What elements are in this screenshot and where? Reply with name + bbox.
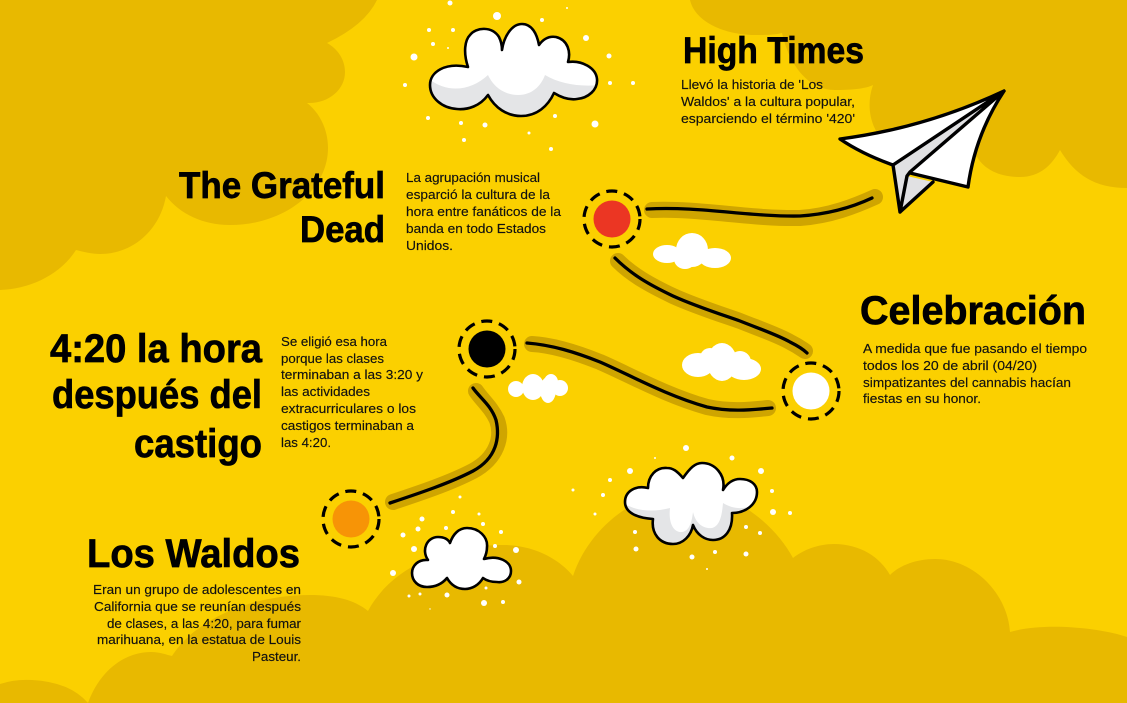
heading: 4:20 la hora después del castigo: después del — [52, 373, 262, 417]
text: Los Waldos: Eran un grupo de adolescentes en — [93, 582, 301, 597]
text: 4:20: Se eligió esa hora — [281, 334, 388, 349]
text: Los Waldos: marihuana, en la estatua de Louis — [97, 632, 302, 647]
text: The Grateful Dead — [406, 170, 562, 253]
text: The Grateful Dead: banda en todo Estados — [406, 221, 547, 236]
text: Los Waldos: California que se reunían después — [94, 599, 302, 614]
text: Celebración — [863, 341, 1087, 406]
heading: The Grateful Dead — [179, 165, 385, 250]
text: High Times: Waldos' a la cultura popular, — [681, 94, 855, 109]
milestone: white — [783, 363, 839, 419]
paper plane — [840, 91, 1004, 212]
heading: High Times: High Times — [683, 30, 864, 71]
text: 4:20: las 4:20. — [281, 435, 331, 450]
background cloud: top right — [690, 0, 1127, 188]
background cloud: top left — [0, 0, 377, 290]
text: 4:20: castigos terminaban a — [281, 418, 415, 433]
text: 4:20: terminaban a las 3:20 y — [281, 367, 424, 382]
path segment: 4:20 to Celebración — [527, 343, 772, 410]
heading: The Grateful Dead: The Grateful — [179, 165, 385, 206]
text: Celebración: simpatizantes del cannabis hacían — [863, 375, 1071, 390]
text: 4:20 — [281, 334, 424, 450]
text: High Times: Llevó la historia de 'Los — [681, 77, 824, 92]
heading: Celebración: Celebración — [860, 289, 1086, 333]
heading: The Grateful Dead: Dead — [300, 209, 385, 250]
heading: Los Waldos: Los Waldos — [87, 532, 300, 576]
text: The Grateful Dead: Unidos. — [406, 238, 453, 253]
heading: 4:20 la hora después del castigo: castigo — [134, 422, 262, 466]
cloud: bottom right with sparkles — [572, 445, 792, 570]
cloud: bottom left with sparkles — [390, 496, 522, 610]
text: Los Waldos: de clases, a las 4:20, para fumar — [107, 616, 302, 631]
milestone: black — [459, 321, 515, 377]
text: Celebración: fiestas en su honor. — [863, 391, 981, 406]
text: The Grateful Dead: La agrupación musical — [406, 170, 540, 185]
text: Los Waldos: Pasteur. — [252, 649, 301, 664]
heading: 4:20 la hora después del castigo — [50, 327, 263, 466]
text: The Grateful Dead: hora entre fanáticos de la — [406, 204, 562, 219]
text: High Times — [681, 77, 855, 126]
heading: 4:20 la hora después del castigo: 4:20 la hora — [50, 327, 263, 371]
text: 4:20: extracurriculares o los — [281, 401, 417, 416]
text: The Grateful Dead: esparció la cultura de la — [406, 187, 551, 202]
background clouds: bottom — [0, 490, 1127, 703]
small cloud near black milestone — [508, 374, 568, 403]
text: Los Waldos — [93, 582, 302, 664]
path segment: Grateful Dead to plane — [647, 197, 875, 218]
milestone: red — [584, 191, 640, 247]
path segment: Celebración to Grateful Dead — [615, 258, 807, 353]
text: Celebración: todos los 20 de abril (04/20) — [863, 358, 1037, 373]
text: 4:20: porque las clases — [281, 351, 385, 366]
small cloud near red milestone — [653, 233, 731, 269]
text: Celebración: A medida que fue pasando el tiempo — [863, 341, 1087, 356]
cloud: top with sparkles — [403, 0, 635, 151]
small cloud near white milestone — [682, 343, 761, 381]
milestone: orange — [323, 491, 379, 547]
path segment: Los Waldos to 4:20 — [390, 388, 499, 503]
text: 4:20: las actividades — [281, 384, 371, 399]
text: High Times: esparciendo el término '420' — [681, 111, 855, 126]
